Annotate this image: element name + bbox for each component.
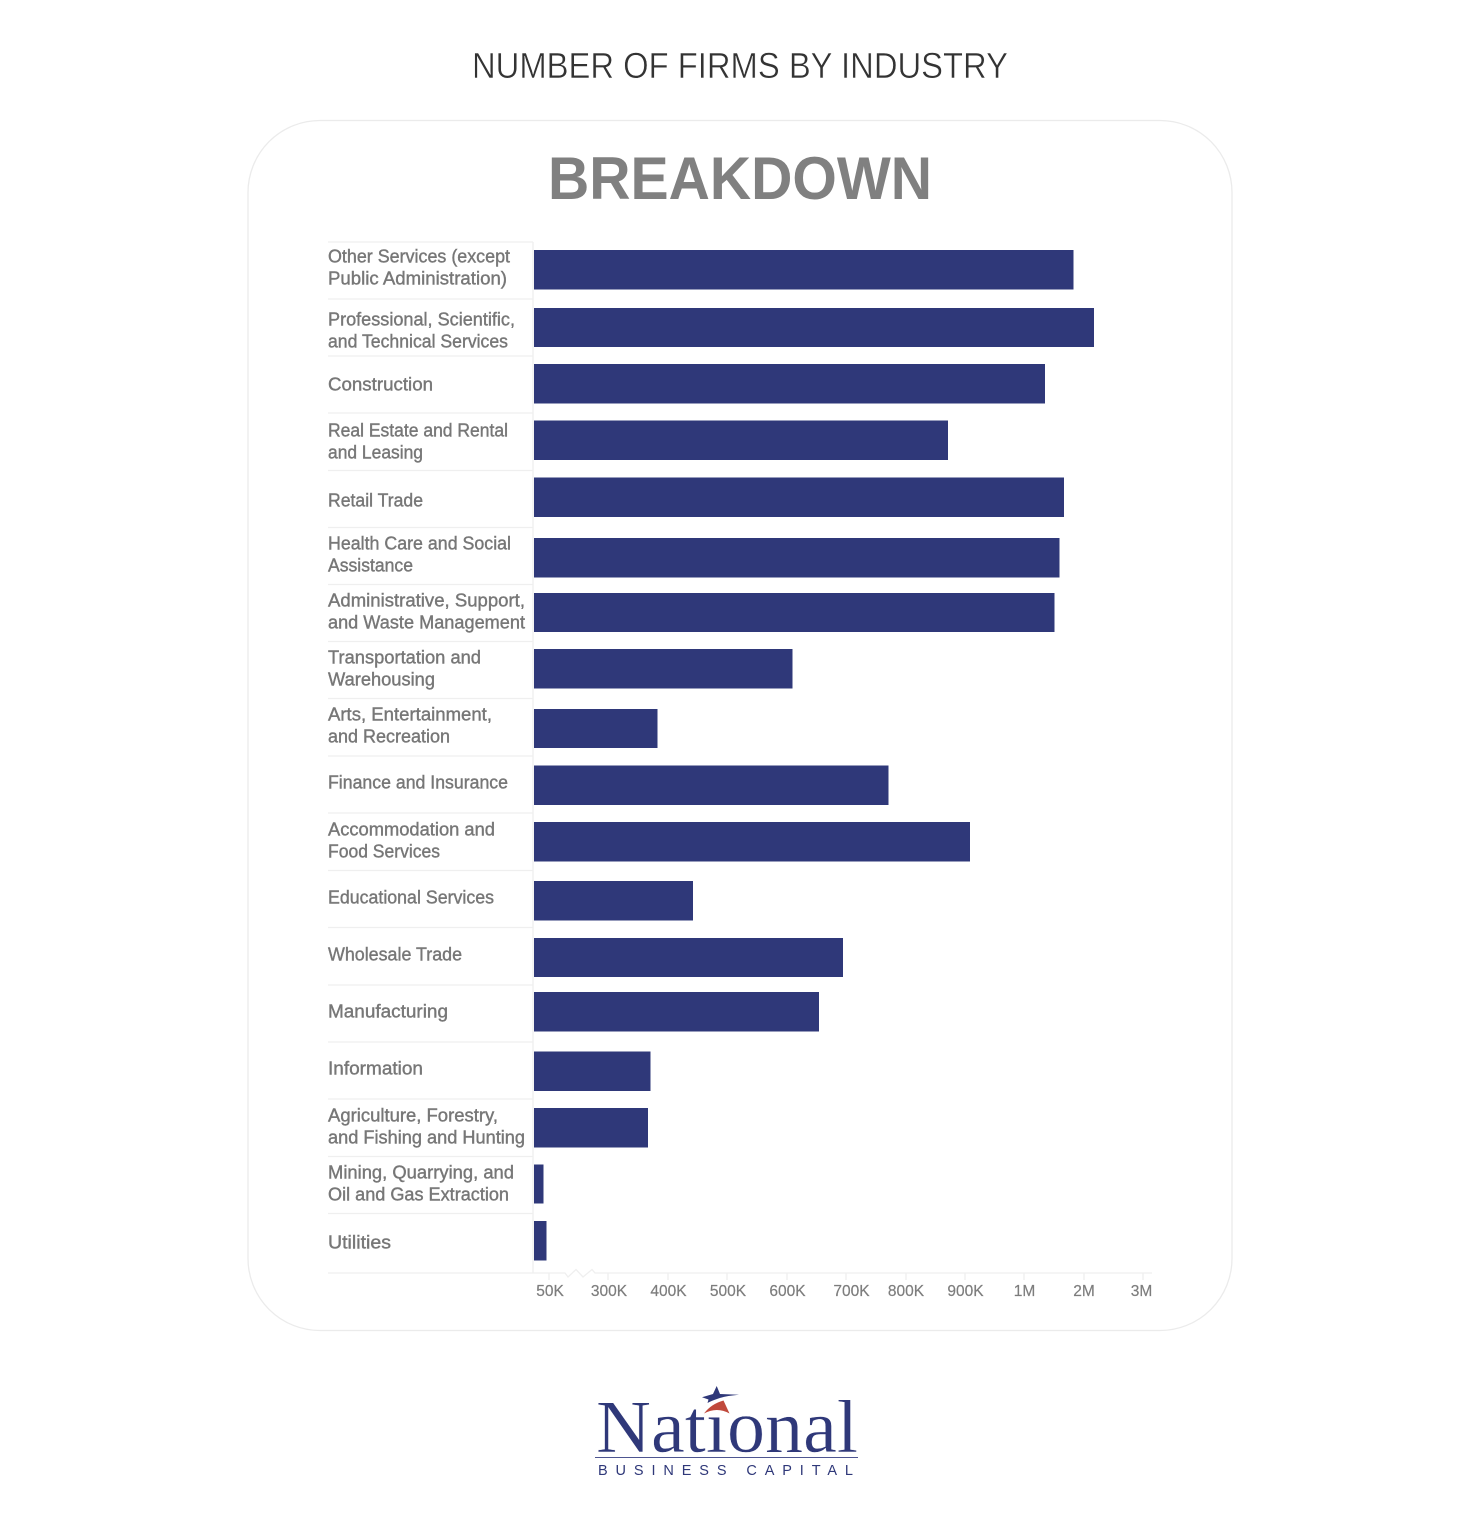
category labels: Oil and Gas Extraction: [328, 1184, 509, 1204]
category labels: Professional, Scientific,: [328, 308, 515, 330]
category labels: Health Care and Social: [328, 532, 511, 554]
x axis labels: 50K: [536, 1283, 564, 1300]
category labels: Warehousing: [328, 668, 435, 690]
category labels: Assistance: [328, 554, 413, 576]
category labels: Accommodation and: [328, 818, 495, 840]
x axis labels: 700K: [833, 1283, 870, 1300]
x axis labels: 3M: [1131, 1283, 1152, 1300]
category labels: Educational Services: [328, 886, 494, 908]
x axis labels: [536, 1283, 1152, 1300]
category labels: [328, 246, 525, 1252]
icon: logo star: [702, 1386, 739, 1414]
heading: breakdown: BREAKDOWN: [548, 145, 932, 212]
logo: National Business Capital: [595, 1386, 858, 1479]
category labels: Wholesale Trade: [328, 944, 462, 964]
category labels: Food Services: [328, 840, 440, 862]
category labels: Manufacturing: [328, 1000, 448, 1022]
x axis labels: 900K: [947, 1283, 984, 1300]
panel: breakdown card: [248, 120, 1232, 1330]
x axis labels: 1M: [1014, 1283, 1035, 1300]
category labels: Other Services (except: [328, 246, 510, 266]
category labels: Public Administration): [328, 268, 507, 288]
category labels: and Waste Management: [328, 612, 525, 632]
x axis labels: 800K: [888, 1283, 925, 1300]
x axis labels: 2M: [1073, 1283, 1095, 1300]
x axis labels: 500K: [710, 1283, 747, 1300]
bars: [534, 250, 1094, 1260]
category labels: Mining, Quarrying, and: [328, 1162, 514, 1182]
category labels: Agriculture, Forestry,: [328, 1104, 498, 1126]
category labels: Retail Trade: [328, 490, 423, 510]
category labels: Transportation and: [328, 646, 481, 668]
category labels: Construction: [328, 374, 433, 394]
category labels: Information: [328, 1058, 423, 1078]
category labels: Finance and Insurance: [328, 772, 508, 792]
x axis labels: 300K: [591, 1283, 628, 1300]
category labels: Utilities: [328, 1232, 391, 1252]
category labels: and Recreation: [328, 726, 450, 746]
category labels: and Leasing: [328, 442, 423, 462]
x axis labels: 400K: [650, 1283, 687, 1300]
category labels: Real Estate and Rental: [328, 420, 508, 440]
logo tagline: BUSINESS CAPITAL: [598, 1463, 853, 1479]
x axis labels: 600K: [769, 1283, 806, 1300]
category labels: and Technical Services: [328, 330, 508, 352]
logo wordmark: National: [596, 1386, 858, 1469]
title: NUMBER OF FIRMS BY INDUSTRY: [472, 45, 1008, 86]
category labels: and Fishing and Hunting: [328, 1126, 525, 1148]
category labels: Arts, Entertainment,: [328, 704, 492, 724]
category labels: Administrative, Support,: [328, 590, 525, 610]
bar chart: [328, 242, 1152, 1300]
